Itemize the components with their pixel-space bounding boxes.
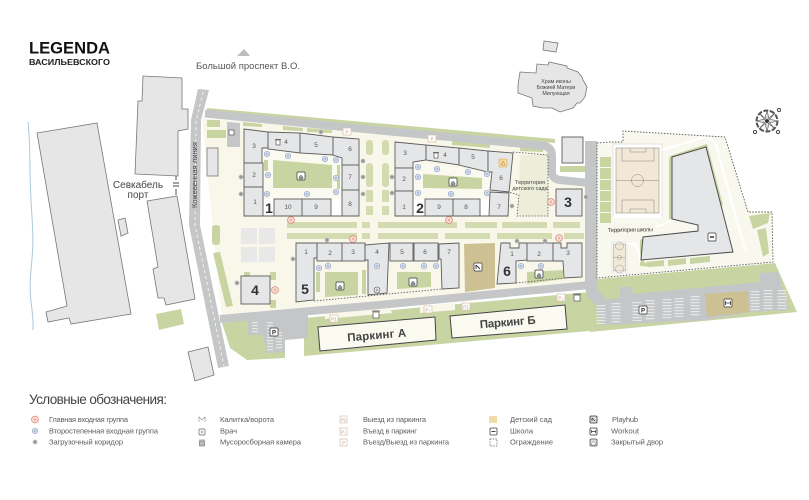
- legend column 5: Закрытый двор: [611, 438, 663, 446]
- Kozhevennaya road: [189, 89, 229, 368]
- school building: [641, 144, 733, 260]
- legend column 1: [32, 415, 159, 446]
- church: Храм иконы: [541, 79, 571, 85]
- roads: [205, 114, 603, 319]
- church: [518, 41, 587, 112]
- block 1: [244, 129, 359, 216]
- neighbouring buildings west: [37, 76, 214, 381]
- parking B: [450, 305, 567, 338]
- school paths: [613, 137, 745, 262]
- central lawns: [287, 140, 584, 239]
- legend column 4: Школа: [510, 426, 534, 436]
- kindergarten icon: [499, 159, 507, 167]
- school territory label: Территория школы: [608, 227, 653, 234]
- legend column 2: Врач: [220, 426, 237, 436]
- logo: ВАСИЛЬЕВСКОГО: [29, 58, 110, 67]
- block 5: 7: [447, 249, 451, 256]
- legend column 5: Playhub: [612, 415, 638, 424]
- legend column 3: P1: [341, 418, 347, 422]
- kindergarten territory: Территория: [515, 180, 545, 186]
- legend column 5: Workout: [611, 426, 640, 436]
- block 5: 6: [423, 249, 427, 256]
- street label: Kozhevennaya: Кожевенная линия: [190, 142, 199, 208]
- site ground: [202, 118, 590, 318]
- church: Божией Матери: [537, 84, 575, 91]
- secondary entrances: [264, 151, 544, 271]
- building 4: 4: [251, 282, 259, 298]
- block 5: 3: [351, 249, 355, 256]
- block 5: [296, 243, 459, 302]
- block 1: 1: [253, 199, 257, 206]
- small parking north-west: [207, 122, 240, 176]
- block 5: 5: [301, 281, 309, 297]
- main entrances: [272, 199, 562, 293]
- legend column 3: Выезд из паркинга: [363, 415, 427, 424]
- legend column 3: P: [342, 440, 345, 446]
- legend column 2: Калитка/ворота: [220, 415, 275, 424]
- playhub icon: [474, 263, 482, 271]
- block 6: [497, 243, 582, 284]
- block 2: 8: [464, 204, 468, 211]
- workout area: [705, 291, 749, 317]
- block 6: 3: [566, 250, 570, 257]
- legend column 4: Ограждение: [510, 438, 553, 446]
- block 2: 7: [497, 204, 501, 211]
- parking B: Паркинг Б: [479, 315, 536, 331]
- legend column 1: Загрузочный коридор: [49, 438, 123, 446]
- legend column 5: [590, 415, 663, 446]
- block 1: 9: [314, 204, 318, 211]
- block 2: 2: [402, 176, 406, 183]
- parking south-west: [248, 315, 308, 353]
- football pitch: [613, 144, 662, 217]
- block 5: 1: [304, 249, 308, 256]
- parking A: Паркинг А: [347, 328, 407, 344]
- compass: [753, 108, 781, 134]
- building 4: [241, 272, 276, 308]
- Sevkabel port label: Севкабель: [113, 179, 163, 191]
- block 1: 4: [284, 139, 288, 146]
- loading corridors: [235, 130, 588, 285]
- parking entry markers: P1: [463, 304, 469, 310]
- block 1: 7: [348, 174, 352, 181]
- doctor icon: [374, 287, 380, 293]
- legend column 3: P↓: [341, 430, 346, 434]
- block 1: 5: [314, 142, 318, 149]
- block 1: 2: [252, 172, 256, 179]
- legend column 3: Въезд/Выезд из паркинга: [363, 438, 450, 446]
- logo: [29, 38, 110, 67]
- parking entry markers: P1: [331, 316, 337, 322]
- parking entry markers: P: [345, 130, 349, 134]
- parking entry markers: P↓: [558, 296, 564, 300]
- block 2: 1: [402, 204, 406, 211]
- block 1: 3: [252, 143, 256, 150]
- paved squares: [241, 228, 275, 262]
- river line: [28, 122, 33, 330]
- parking entry markers: P↓: [425, 308, 431, 312]
- logo: LEGENDA: [29, 38, 110, 58]
- legend column 1: Второстепенная входная группа: [49, 426, 159, 436]
- legend column 1: Главная входная группа: [49, 415, 129, 424]
- block 6: 6: [503, 263, 511, 279]
- block 2: 4: [443, 152, 447, 159]
- legend column 4: [489, 415, 553, 446]
- parking east: [595, 272, 789, 325]
- building 3: 3: [564, 194, 572, 210]
- building 3: [556, 137, 583, 216]
- kindergarten territory: детского сада: [512, 186, 549, 192]
- block 1: 1: [265, 200, 273, 216]
- parking entry markers: [330, 128, 565, 322]
- legend column 2: Мусоросборная камера: [220, 438, 302, 446]
- block 2: 9: [437, 204, 441, 211]
- school ground: [597, 131, 773, 278]
- block 2: 2: [416, 200, 424, 216]
- Sevkabel port label: порт: [128, 190, 149, 201]
- block 2: 3: [403, 150, 407, 157]
- basketball court: [612, 242, 627, 273]
- block 5: 4: [375, 249, 379, 256]
- block 1: 10: [284, 204, 292, 211]
- kindergarten territory: [509, 152, 549, 216]
- playhub area: [464, 243, 495, 292]
- block 6: 2: [537, 251, 541, 258]
- trash icons: [275, 140, 581, 318]
- school lawns: [600, 157, 770, 267]
- parking entry markers: P: [430, 136, 434, 142]
- block 1: 8: [348, 201, 352, 208]
- green strips by the roads: [207, 108, 586, 307]
- street label: Bolshoy prospekt: Большой проспект В.О.: [196, 61, 300, 72]
- legend column 2: [199, 415, 302, 446]
- legend column 3: Въезд в паркинг: [363, 426, 417, 436]
- block 2: 6: [499, 175, 503, 182]
- legend heading: Условные обозначения:: [29, 392, 167, 407]
- block 2: 5: [471, 154, 475, 161]
- courtyard icons: [297, 172, 543, 290]
- parking east: P: [641, 308, 645, 314]
- parking south-west: P: [272, 330, 276, 336]
- block 1: 6: [348, 146, 352, 153]
- parking A: [318, 317, 436, 351]
- green lower belts: [222, 263, 797, 360]
- legend column 4: Детский сад: [510, 415, 553, 424]
- block 2: [395, 142, 513, 216]
- block 5: 5: [400, 249, 404, 256]
- school fence: [597, 131, 773, 278]
- Sevkabel port label: [113, 176, 179, 201]
- block 5: 2: [328, 250, 332, 257]
- church: Милующая: [542, 91, 570, 97]
- direction arrow: [237, 49, 250, 56]
- block 6: 1: [510, 251, 514, 258]
- legend column 3: [340, 415, 450, 446]
